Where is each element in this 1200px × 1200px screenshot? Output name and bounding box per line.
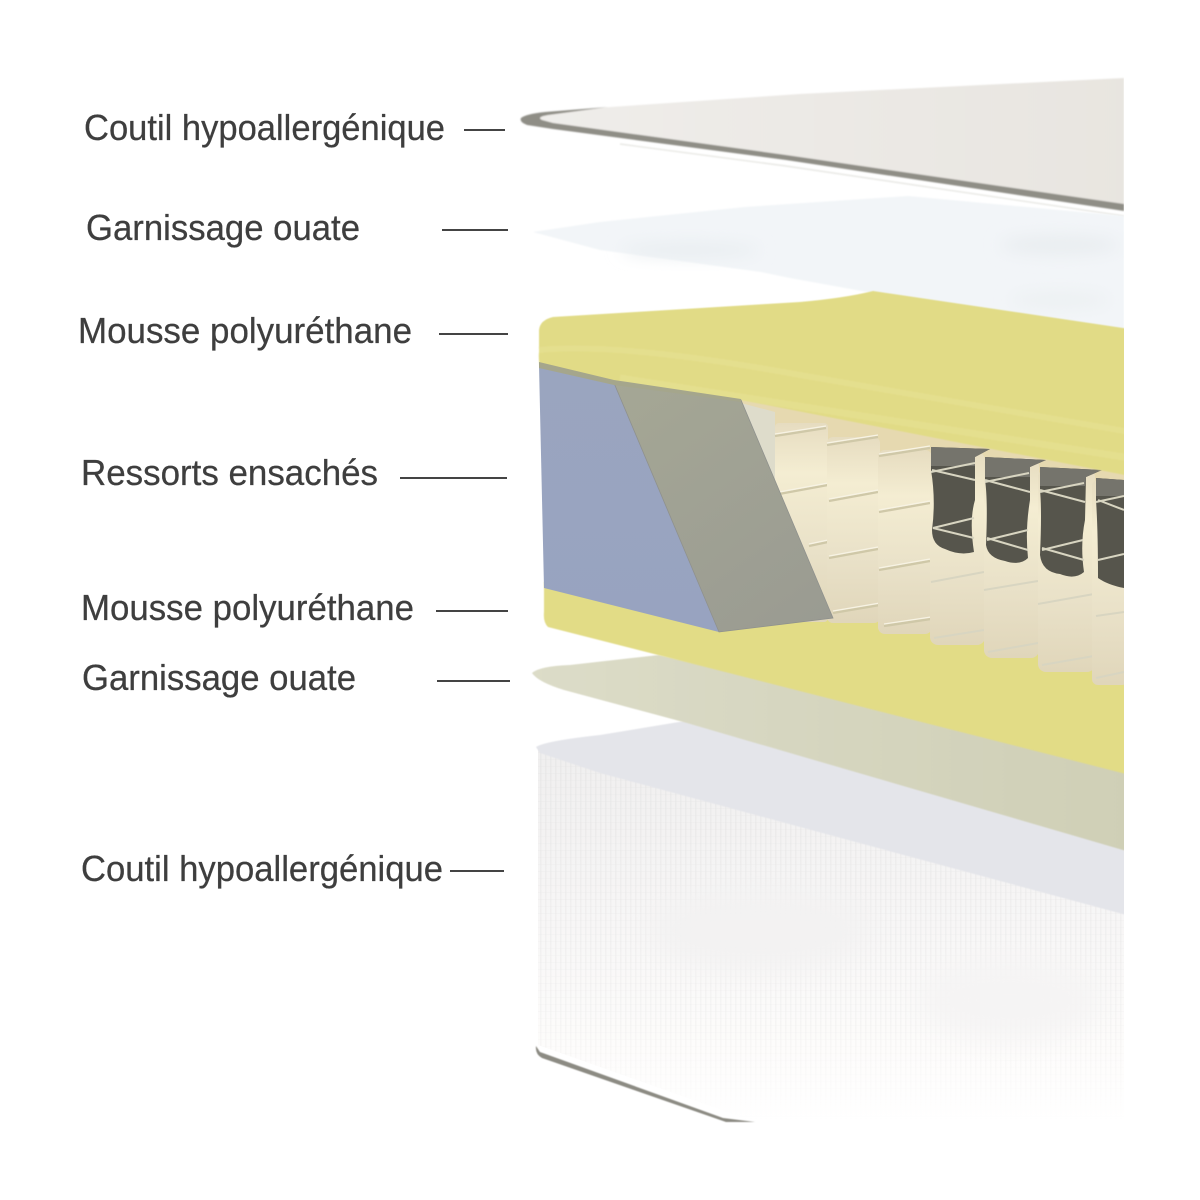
label: mousse polyurethane top: Mousse polyuréthane xyxy=(78,310,412,351)
layer: foam border blue face xyxy=(539,365,719,632)
layer: foam border top edge xyxy=(539,362,741,402)
layer: top ticking sheet xyxy=(520,78,1124,216)
spring column 8 xyxy=(1092,478,1124,685)
spring column 7 xyxy=(1038,467,1102,672)
layer: spring tops backing xyxy=(742,400,1124,481)
layer: foam border grey bevel xyxy=(614,383,833,632)
spring column 5 xyxy=(930,447,990,645)
layer: lower ticking woven side xyxy=(538,750,1124,1064)
spring column 2 xyxy=(775,423,832,622)
label: coutil hypoallergenique top: Coutil hypoallergénique xyxy=(84,107,445,148)
label: ressorts ensaches: Ressorts ensachés xyxy=(81,452,378,493)
label: coutil hypoallergenique bottom: Coutil hypoallergénique xyxy=(81,848,443,889)
layer: lower ticking bottom rim xyxy=(536,1046,755,1122)
layer: upper wadding xyxy=(533,196,1124,332)
layer: lower ticking top face xyxy=(536,720,1130,916)
layer: pocket springs xyxy=(741,403,1128,685)
spring column 3 xyxy=(827,435,880,623)
spring column 4 xyxy=(878,446,932,634)
layer: upper polyurethane foam xyxy=(539,291,1130,476)
spring column 6 xyxy=(984,457,1046,658)
label: mousse polyurethane bottom: Mousse polyuréthane xyxy=(81,587,414,628)
label: garnissage ouate bottom: Garnissage ouate xyxy=(82,657,356,698)
label: garnissage ouate top: Garnissage ouate xyxy=(86,207,360,248)
spring column 1 xyxy=(743,404,775,480)
layer: lower polyurethane foam xyxy=(544,582,1130,775)
layer: lower wadding xyxy=(532,655,1130,852)
diagram: exploded mattress layers xyxy=(520,78,1130,1122)
